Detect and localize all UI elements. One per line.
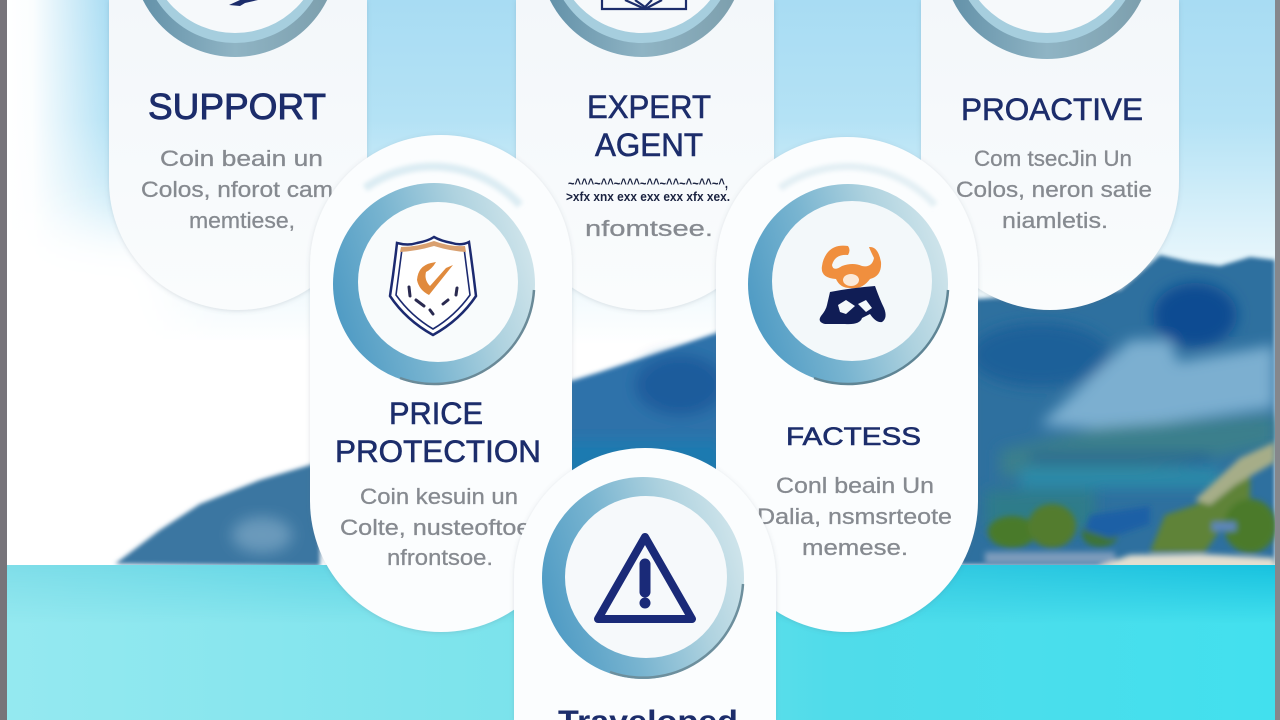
icon: support ring	[142, 0, 328, 57]
text block: price protection: Colte, nusteoftoel	[340, 515, 536, 540]
icon: traveloped ring	[542, 477, 744, 679]
text block: support: Coin beain un	[160, 146, 323, 171]
text block: facless: memese.	[802, 535, 908, 560]
heading: price protection: PROTECTION	[335, 433, 541, 469]
heading: expert agent	[587, 89, 711, 163]
panel: traveloped	[514, 448, 776, 720]
panel: expert agent	[516, 0, 774, 310]
text block: expert agent: nfomtsee.	[585, 216, 713, 241]
heading: price protection: PRICE	[389, 395, 483, 431]
panel: price protection	[310, 135, 572, 632]
icon: orange head and navy figure	[820, 246, 886, 324]
heading: price protection	[335, 395, 541, 469]
icon: price protection ring	[333, 167, 535, 385]
text block: price protection: nfrontsoe.	[387, 545, 493, 570]
mountain: centre	[555, 330, 725, 480]
text block: facless: Dalia, nsmsrteote	[757, 504, 952, 529]
sea	[0, 565, 1280, 720]
icon: facless ring	[748, 167, 948, 384]
text block: price protection: Coin kesuin un	[360, 484, 518, 509]
heading: expert agent: EXPERT	[587, 89, 711, 125]
text block: support: memtiese,	[189, 208, 295, 233]
heading: support: SUPPORT	[148, 86, 326, 127]
mountain: right with trees and beach	[960, 255, 1276, 571]
text block: proactive	[956, 146, 1152, 233]
text block: price protection	[340, 484, 536, 570]
panel: support	[109, 0, 367, 310]
text block: facless	[757, 473, 952, 560]
heading: expert agent: AGENT	[595, 127, 703, 163]
heading: proactive: PROACTIVE	[961, 91, 1143, 127]
text block: proactive: Com tsecJin Un	[974, 146, 1132, 171]
panel: proactive	[921, 0, 1179, 310]
text block: expert agent	[566, 175, 730, 241]
text block: proactive: Colos, neron satie	[956, 177, 1152, 202]
text block: support	[141, 146, 333, 233]
icon: expert agent ring	[550, 0, 734, 57]
panel: facless	[716, 137, 978, 632]
mountain: left	[115, 462, 320, 566]
heading: facless: FACTESS	[786, 423, 921, 451]
icon: shield with check	[390, 237, 476, 335]
text block: support: Colos, nforot cam	[141, 177, 333, 202]
icon: warning triangle	[598, 537, 692, 619]
text block: proactive: niamletis.	[1002, 208, 1108, 233]
text block: expert agent: ~^^^~^^~^^^~^^~^^~^~^^~^,	[568, 175, 728, 191]
text block: expert agent: >xfx xnx exx exx exx xfx xex.	[566, 189, 730, 204]
text block: facless: Conl beain Un	[776, 473, 934, 498]
icon: proactive ring	[942, 0, 1152, 59]
